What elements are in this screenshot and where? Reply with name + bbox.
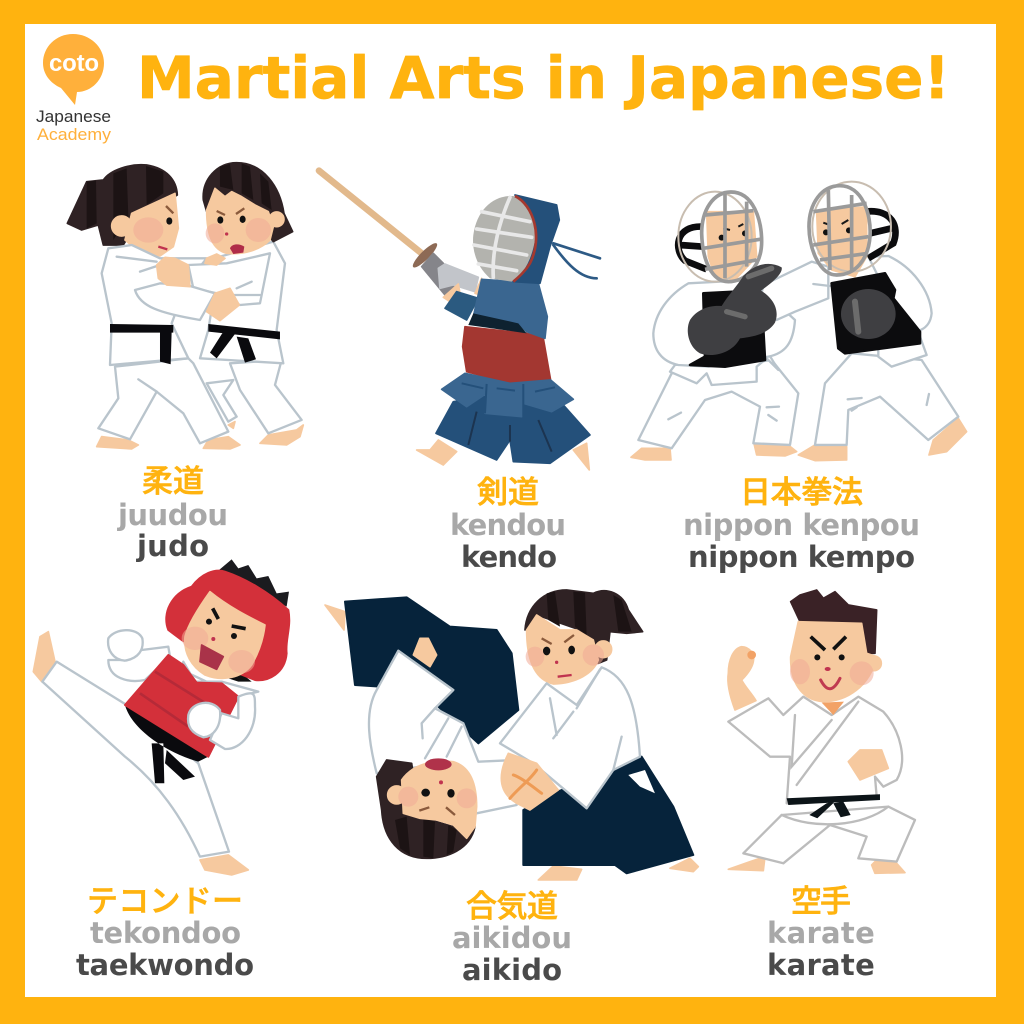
face grille xyxy=(473,196,535,282)
thrown person arm and body xyxy=(369,651,517,813)
face xyxy=(791,622,877,702)
feet xyxy=(631,418,967,461)
caption: aikido xyxy=(452,889,572,987)
front arm xyxy=(210,693,255,749)
back fist xyxy=(108,630,143,661)
neck hair xyxy=(228,673,252,682)
english: karate xyxy=(767,948,875,982)
raised foot xyxy=(33,632,55,682)
right fighter hair xyxy=(203,163,293,242)
reading: karate xyxy=(767,916,875,950)
helmet strings xyxy=(553,243,600,278)
thrown person hair xyxy=(377,760,475,858)
reading: kendou xyxy=(450,508,566,542)
left fighter jacket xyxy=(102,245,207,365)
thrown person hand xyxy=(413,638,437,667)
standing person feet xyxy=(538,858,698,880)
english: aikido xyxy=(462,953,562,987)
right fighter arm xyxy=(758,262,828,320)
waist flaps xyxy=(442,373,573,417)
reading: aikidou xyxy=(452,921,572,955)
kanji: 柔道 xyxy=(142,464,204,499)
kanji: 日本拳法 xyxy=(740,475,863,510)
logo word: coto: coto xyxy=(49,50,99,77)
logo: coto Japanese Academy xyxy=(36,34,112,144)
red breastplate xyxy=(463,327,551,383)
caption: taekwondo xyxy=(76,884,254,982)
thrown person foot xyxy=(325,605,345,630)
sleeve xyxy=(445,292,478,320)
illustration: judo xyxy=(67,163,303,449)
hand finger lines xyxy=(510,770,542,798)
hands xyxy=(157,254,239,321)
caption: judo xyxy=(117,464,228,563)
english: judo xyxy=(136,529,209,563)
caption: karate xyxy=(767,884,875,982)
kanji: 合気道 xyxy=(466,889,558,924)
english: nippon kempo xyxy=(688,540,915,574)
standing foot xyxy=(200,855,248,875)
feet xyxy=(728,857,905,873)
right fighter legs xyxy=(815,353,958,445)
title: Martial Arts in Japanese! xyxy=(137,44,950,112)
left fighter hair xyxy=(67,165,177,245)
red vest xyxy=(125,655,238,757)
left fighter face xyxy=(125,193,178,256)
black belt xyxy=(125,702,208,783)
reading: tekondoo xyxy=(90,916,241,950)
reading: juudou xyxy=(117,498,228,532)
right fighter face xyxy=(207,188,273,254)
left headband xyxy=(678,227,707,269)
right fighter torso and arm xyxy=(868,256,932,333)
illustration: aikido xyxy=(325,590,698,880)
illustration: kendo xyxy=(319,171,600,470)
red headgear xyxy=(166,571,289,680)
kicking leg xyxy=(42,662,229,857)
illustration: taekwondo xyxy=(33,559,289,875)
left fighter legs xyxy=(98,358,228,443)
torso xyxy=(473,279,547,338)
left fighter legs xyxy=(638,360,798,448)
red helmet edge xyxy=(513,196,536,282)
right fighter jacket hem xyxy=(878,337,927,367)
right fighter back leg xyxy=(207,380,237,422)
thrown person hakama xyxy=(345,597,518,743)
thrown person face xyxy=(402,761,477,838)
glove highlights xyxy=(727,268,772,317)
right fighter arm xyxy=(188,253,270,305)
gloves and hands xyxy=(422,253,457,295)
feet xyxy=(97,422,303,449)
clasped hands xyxy=(501,753,558,810)
standing person hair xyxy=(525,590,643,663)
right glove xyxy=(841,289,896,339)
logo word: Japanese: Japanese xyxy=(36,107,111,126)
neck xyxy=(822,702,844,715)
hair xyxy=(791,590,877,653)
caption: kendo xyxy=(450,475,566,574)
illustration: karate xyxy=(728,590,915,873)
illustration: nippon kempo xyxy=(631,182,967,461)
left face xyxy=(707,212,757,280)
collar xyxy=(182,662,258,697)
kanji: 剣道 xyxy=(477,475,539,510)
raised arm xyxy=(728,647,756,710)
standing person hakama xyxy=(523,757,693,873)
sword guard xyxy=(410,240,440,270)
black belt xyxy=(787,794,880,818)
bamboo sword xyxy=(319,171,422,253)
trousers xyxy=(743,807,915,863)
feet xyxy=(417,440,589,470)
reading: nippon kenpou xyxy=(683,508,920,542)
right fighter front leg xyxy=(230,360,302,433)
left face cage xyxy=(702,192,762,282)
english: kendo xyxy=(461,540,557,574)
kana: テコンドー xyxy=(87,884,243,919)
left fighter torso and arm xyxy=(653,280,795,367)
right headband xyxy=(865,211,895,258)
left fighter jacket hem xyxy=(670,353,778,385)
left chest protector xyxy=(690,292,765,367)
back arm xyxy=(108,647,170,681)
caption: nippon kempo xyxy=(683,475,920,574)
icon: speech bubble xyxy=(43,34,104,105)
english: taekwondo xyxy=(76,948,254,982)
right face cage xyxy=(809,186,870,275)
face xyxy=(185,592,265,678)
hair spikes xyxy=(218,559,289,607)
front fist xyxy=(188,703,220,737)
left gloves xyxy=(688,264,782,355)
helmet hood xyxy=(513,195,559,283)
jacket xyxy=(728,697,902,803)
right fighter jacket xyxy=(200,242,285,363)
standing person face xyxy=(527,615,598,684)
kanji: 空手 xyxy=(791,884,851,919)
hakama skirt xyxy=(436,390,590,463)
black belt xyxy=(468,313,527,333)
logo word: Academy: Academy xyxy=(37,125,112,144)
right chest protector xyxy=(832,273,920,353)
hand xyxy=(848,750,888,780)
left fighter arm xyxy=(135,283,215,320)
standing person jacket xyxy=(500,667,640,808)
black belts xyxy=(110,324,280,364)
right face xyxy=(817,207,867,277)
